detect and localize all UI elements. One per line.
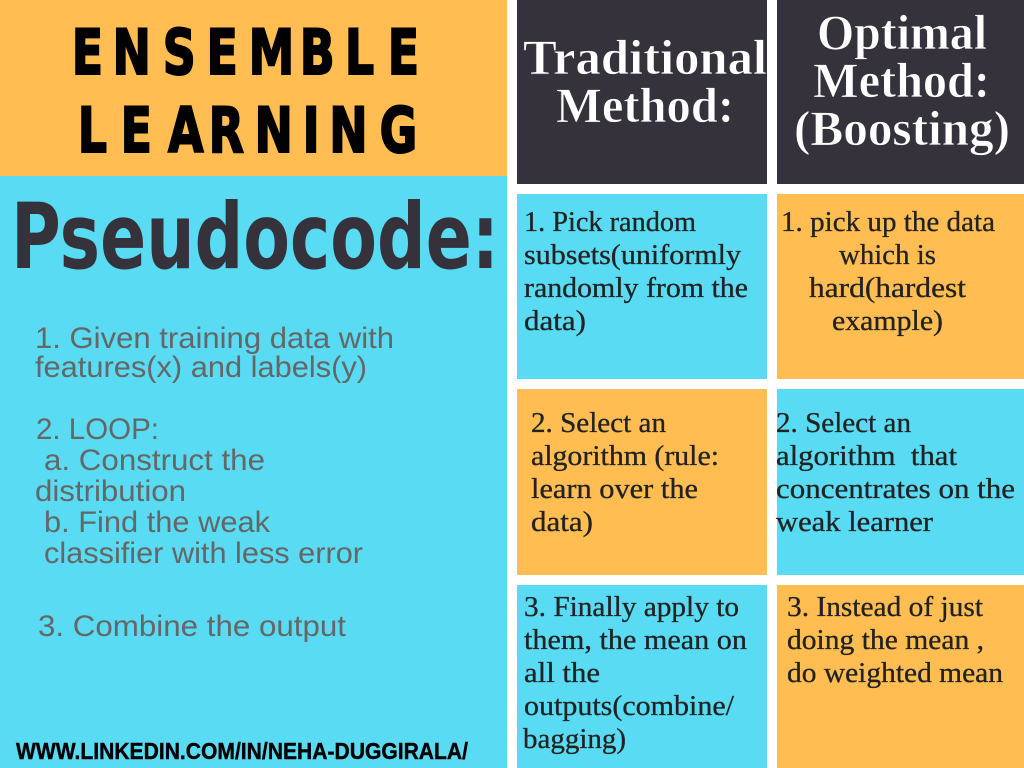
card: optimal step 3: do weighted mean xyxy=(787,658,1003,689)
column header: traditional method: Traditional xyxy=(523,29,767,85)
pseudocode steps: a. Construct the xyxy=(44,444,265,477)
panel: pseudocode xyxy=(0,176,507,768)
card: traditional step 2 xyxy=(517,389,767,575)
card: traditional step 3 xyxy=(517,585,767,768)
column header: optimal method xyxy=(777,0,1024,184)
pseudocode steps xyxy=(35,322,394,643)
column header: optimal method: (Boosting) xyxy=(794,100,1010,156)
card: traditional step 2: learn over the xyxy=(531,474,698,505)
pseudocode steps: b. Find the weak xyxy=(44,506,271,539)
column header: traditional method: Method: xyxy=(556,77,734,133)
card: optimal step 3 xyxy=(777,585,1024,768)
card: optimal step 1: which is xyxy=(839,240,936,271)
footer link: WWW.LINKEDIN.COM/IN/NEHA-DUGGIRALA/ xyxy=(16,738,469,764)
card: optimal step 2: algorithm that xyxy=(776,441,957,472)
pseudocode steps: 2. LOOP: xyxy=(36,413,159,446)
pseudocode steps: 1. Given training data with xyxy=(35,322,394,355)
card: traditional step 1: 1. Pick random xyxy=(524,207,696,238)
panel: title banner xyxy=(0,0,507,176)
pseudocode steps: 3. Combine the output xyxy=(38,610,347,643)
card: optimal step 2: concentrates on the xyxy=(776,474,1015,505)
card: optimal step 2: weak learner xyxy=(776,507,934,538)
card: optimal step 1: example) xyxy=(832,306,943,337)
card: optimal step 3: doing the mean , xyxy=(787,625,984,656)
pseudocode steps: classifier with less error xyxy=(44,537,363,570)
card: traditional step 3: 3. Finally apply to xyxy=(524,592,739,623)
card: traditional step 2: data) xyxy=(531,507,593,538)
pseudocode steps: distribution xyxy=(35,475,186,508)
card: optimal step 1: hard(hardest xyxy=(809,273,966,304)
card: traditional step 1: data) xyxy=(524,306,586,337)
card: optimal step 2: 2. Select an xyxy=(776,408,911,439)
column header: traditional method xyxy=(517,0,767,184)
title line: LEARNING: LEARNING xyxy=(78,94,417,167)
card: traditional step 3: them, the mean on xyxy=(524,625,747,656)
card: traditional step 1: subsets(uniformly xyxy=(524,240,741,271)
column header: optimal method: Optimal xyxy=(817,4,987,60)
card: optimal step 3: 3. Instead of just xyxy=(787,592,983,623)
card: optimal step 1 xyxy=(777,194,1024,379)
card: traditional step 1: randomly from the xyxy=(524,273,748,304)
title line: ENSEMBLE: ENSEMBLE xyxy=(72,16,419,89)
pseudocode steps: features(x) and labels(y) xyxy=(35,351,367,384)
card: traditional step 3: bagging) xyxy=(523,724,626,755)
card: traditional step 2: algorithm (rule: xyxy=(531,441,719,472)
card: traditional step 1 xyxy=(517,194,767,379)
card: traditional step 3: all the xyxy=(524,658,600,689)
card: optimal step 1: 1. pick up the data xyxy=(781,207,996,238)
card: optimal step 2 xyxy=(776,389,1024,575)
card: traditional step 3: outputs(combine/ xyxy=(524,691,734,722)
heading: Pseudocode: Pseudocode: xyxy=(11,185,499,290)
column header: optimal method: Method: xyxy=(813,52,990,108)
card: traditional step 2: 2. Select an xyxy=(531,408,666,439)
